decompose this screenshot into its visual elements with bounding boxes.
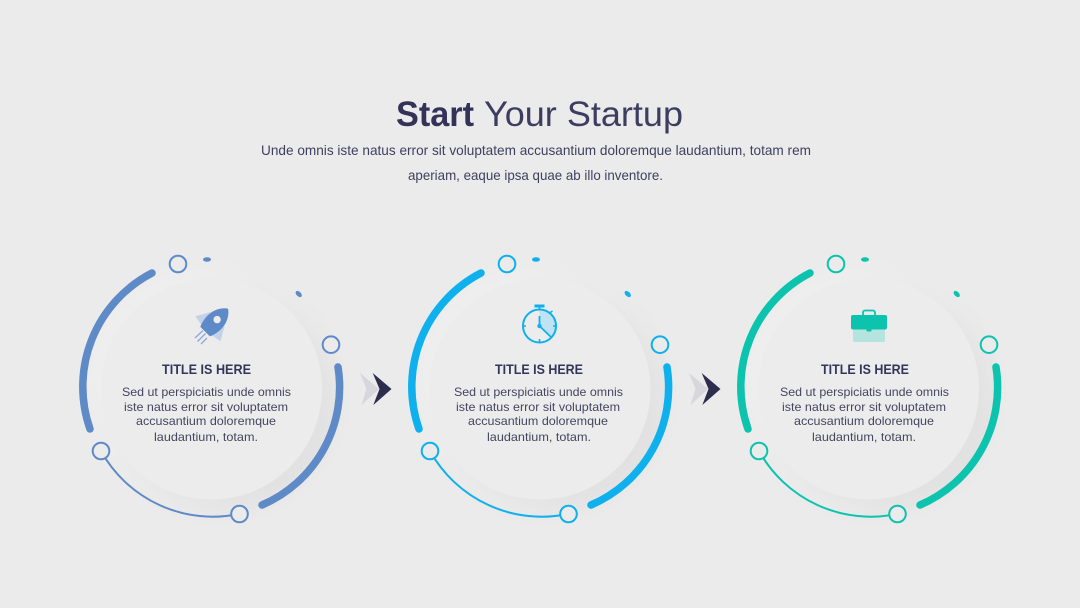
step 1 heading: TITLE IS HERE	[162, 361, 251, 377]
inner disc 2	[430, 278, 650, 500]
step 3 body: accusantium doloremque	[794, 414, 934, 428]
icon: briefcase	[851, 310, 887, 342]
step 1 body	[122, 385, 291, 444]
step 3 body: iste natus error sit voluptatem	[782, 400, 946, 414]
arrow 2	[689, 373, 720, 405]
ring 1	[83, 256, 340, 522]
ring 3	[741, 256, 998, 522]
subtitle text: aperiam, eaque ipsa quae ab illo inventore.	[408, 167, 663, 183]
icon: stopwatch	[523, 306, 556, 342]
panel: step 2	[412, 256, 669, 522]
step 1 body: laudantium, totam.	[154, 430, 258, 444]
ring 2	[412, 256, 669, 522]
step 2 heading: TITLE IS HERE	[495, 361, 583, 377]
title: Your Startup	[484, 95, 683, 134]
step 2 body: Sed ut perspiciatis unde omnis	[454, 385, 623, 399]
step 3 body	[780, 385, 949, 444]
step 2 body: accusantium doloremque	[468, 414, 608, 428]
step 1 body: accusantium doloremque	[136, 414, 276, 428]
icon: rocket	[193, 296, 241, 344]
inner disc 3	[758, 278, 979, 500]
inner disc 1	[101, 278, 322, 500]
subtitle text: Unde omnis iste natus error sit voluptatem accusantium doloremque laudantium, totam rem	[261, 142, 811, 158]
panel: step 3	[741, 256, 998, 522]
title	[396, 95, 683, 134]
step 1 body: Sed ut perspiciatis unde omnis	[122, 385, 291, 399]
step 2 body: laudantium, totam.	[487, 430, 591, 444]
step 1 body: iste natus error sit voluptatem	[124, 400, 288, 414]
step 3 body: Sed ut perspiciatis unde omnis	[780, 385, 949, 399]
step 2 body	[454, 385, 623, 444]
step 3 body: laudantium, totam.	[812, 430, 916, 444]
subtitle text	[261, 142, 811, 183]
arrow 1	[360, 373, 392, 405]
step 2 body: iste natus error sit voluptatem	[456, 400, 620, 414]
panel: step 1	[83, 256, 340, 522]
step 3 heading: TITLE IS HERE	[821, 361, 909, 377]
title: Start	[396, 95, 474, 134]
